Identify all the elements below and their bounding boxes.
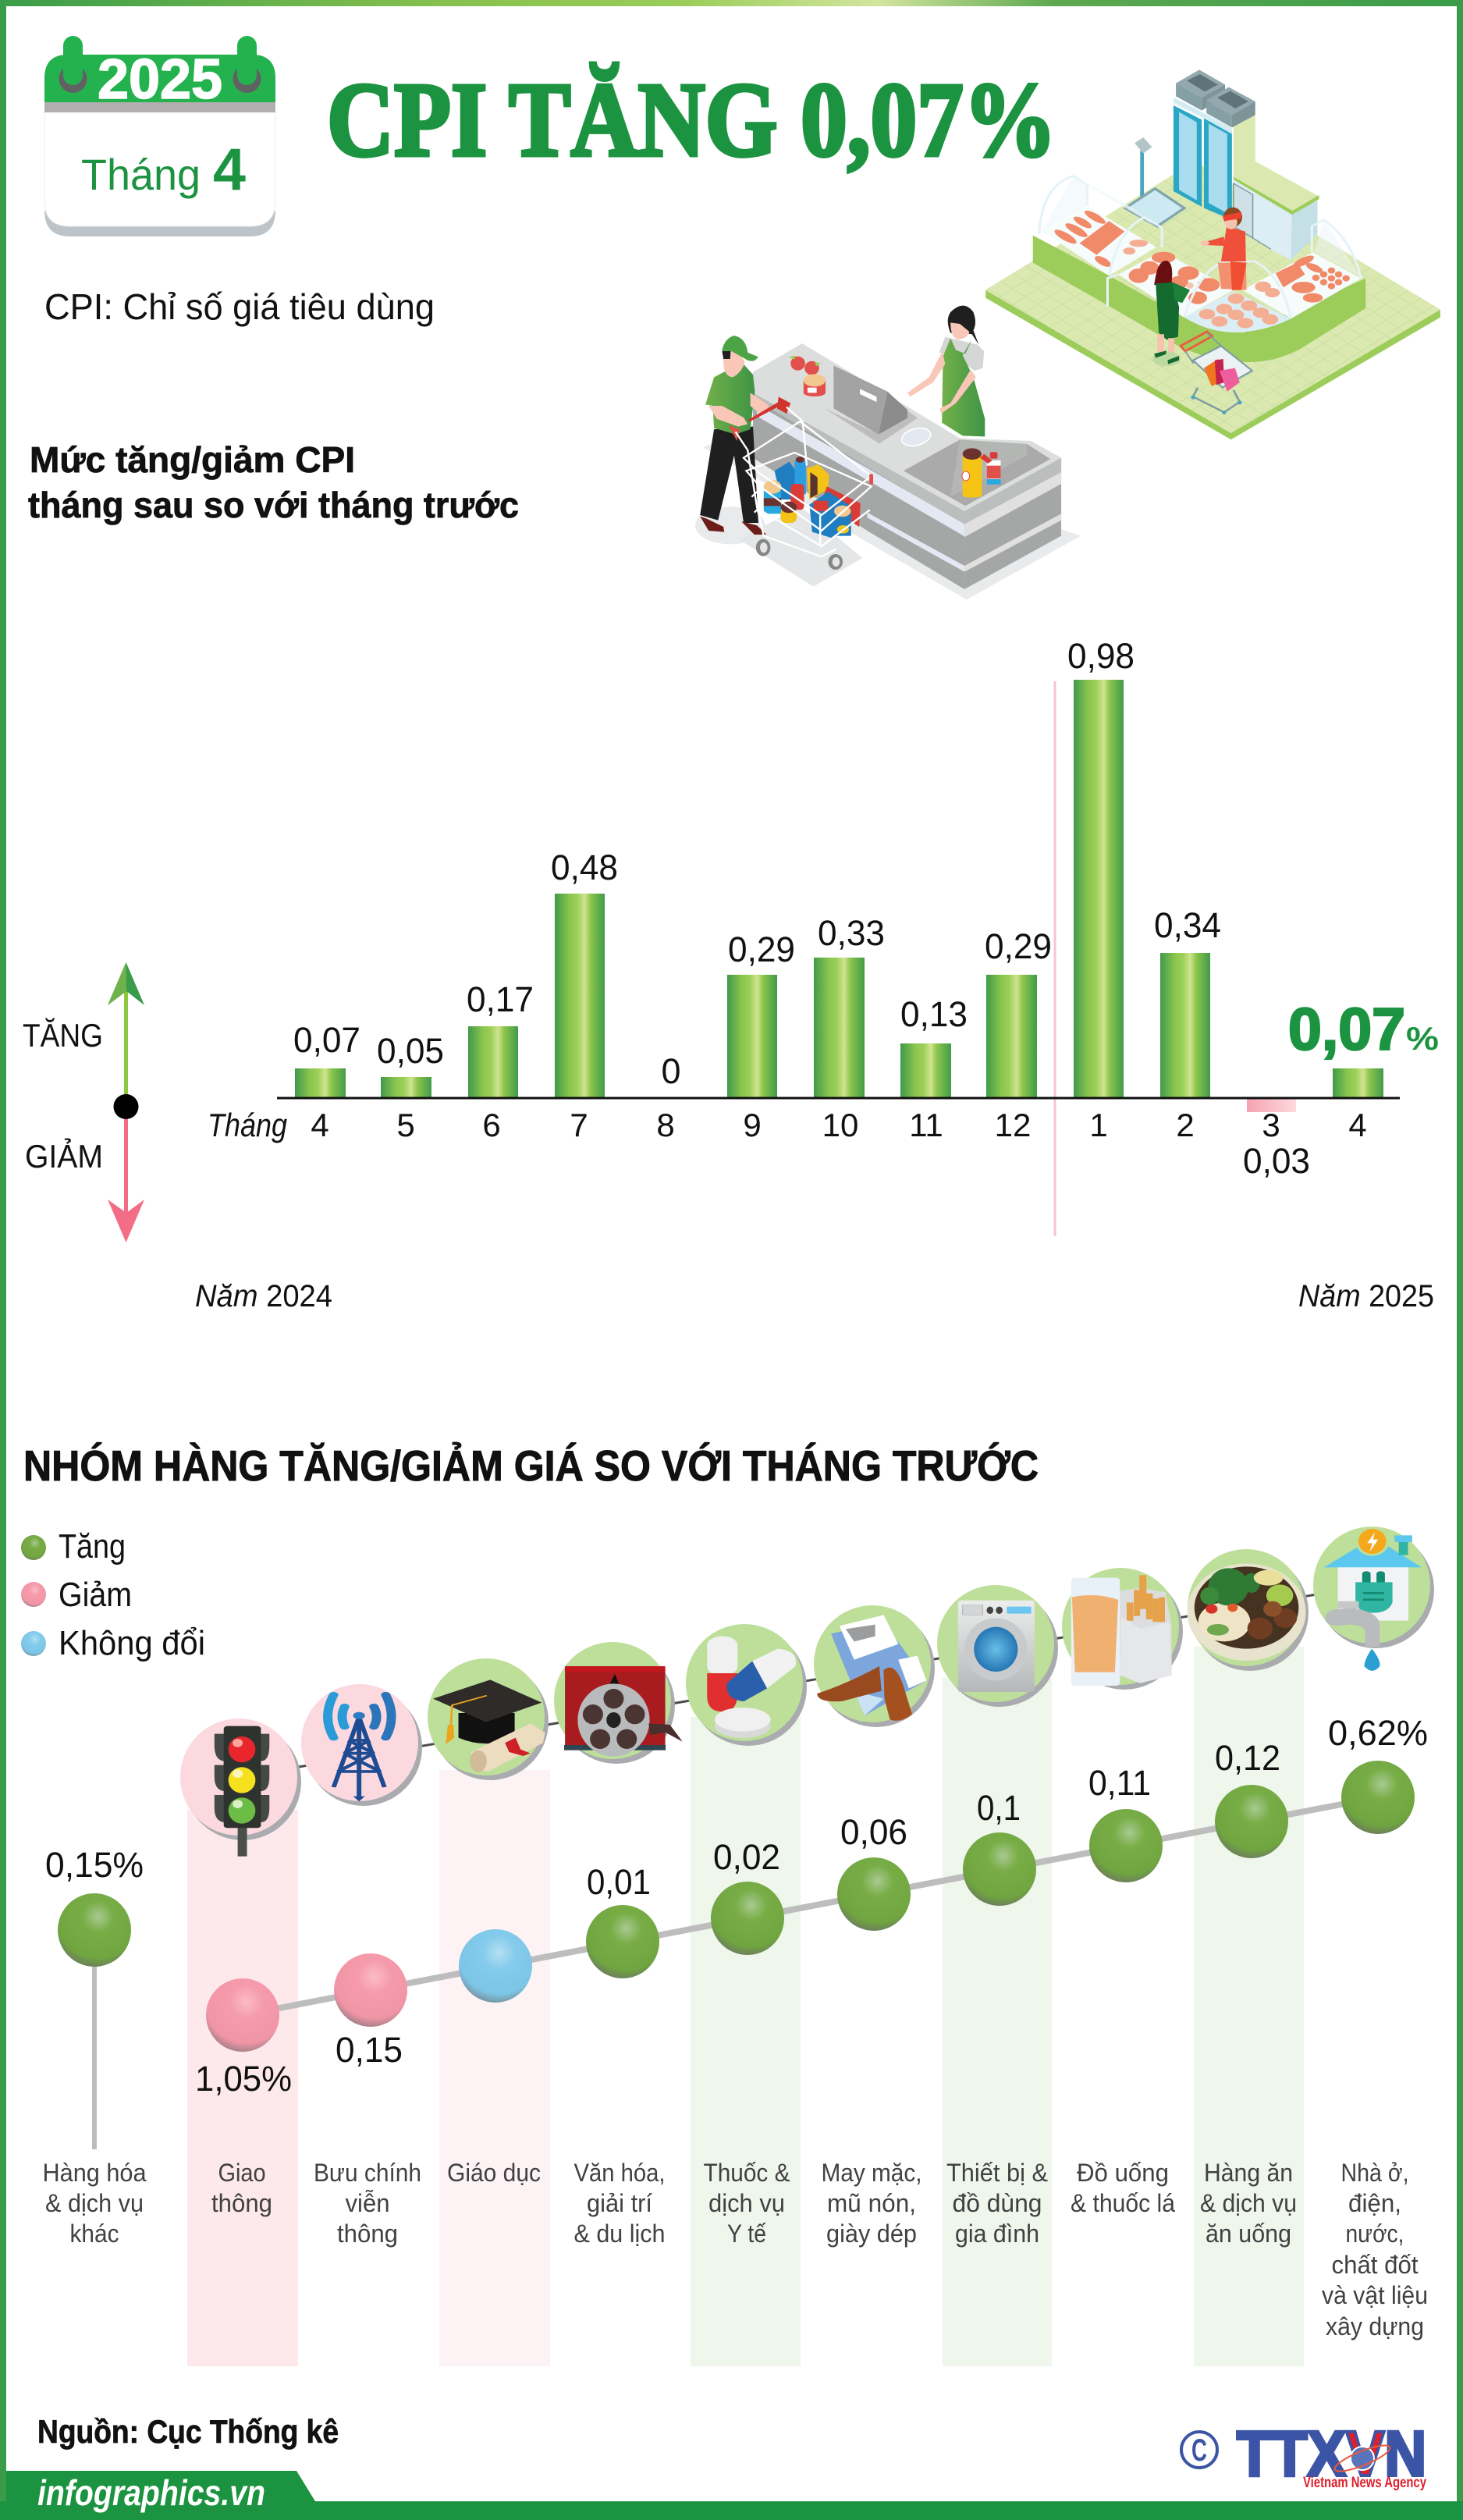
category highlight columns bbox=[187, 1647, 1304, 2366]
category names: Y tế bbox=[727, 2220, 766, 2248]
bar values: 0,34 bbox=[1154, 905, 1221, 945]
icon: noodle bowl bbox=[1188, 1563, 1306, 1661]
connector lines for balls bbox=[94, 1797, 1378, 2149]
highlighted value: % bbox=[1406, 1020, 1439, 1057]
bar values: 0,13 bbox=[900, 994, 968, 1034]
apples and can bbox=[789, 355, 826, 396]
bar values: 0,29 bbox=[985, 926, 1052, 966]
legend: Không đổi bbox=[59, 1624, 205, 1662]
month axis labels: 12 bbox=[995, 1107, 1031, 1143]
value labels per category: 0,15% bbox=[45, 1845, 144, 1885]
category names: gia đình bbox=[955, 2220, 1039, 2248]
legend bbox=[21, 1527, 205, 1662]
value labels per category: 0,62% bbox=[1328, 1713, 1428, 1753]
bar values bbox=[293, 636, 1310, 1181]
month axis labels: 10 bbox=[822, 1107, 858, 1143]
category names: thông bbox=[211, 2189, 272, 2217]
bar values: 0,07 bbox=[293, 1020, 360, 1060]
icon: house utilities bbox=[1324, 1527, 1422, 1671]
legend: Tăng bbox=[59, 1527, 126, 1566]
category names: Thiết bị & bbox=[946, 2159, 1048, 2187]
category names: May mặc, bbox=[821, 2159, 922, 2187]
bar values: 0,29 bbox=[728, 929, 795, 969]
legend: Giảm bbox=[59, 1576, 132, 1614]
month axis labels: 8 bbox=[656, 1107, 675, 1143]
month axis labels: 2 bbox=[1176, 1107, 1195, 1143]
category names: Hàng hóa bbox=[42, 2159, 147, 2187]
icon connector line bbox=[239, 1585, 1372, 1777]
balls: values per category bbox=[58, 1761, 1415, 2052]
woman in red bbox=[1201, 208, 1247, 290]
category names: & dịch vụ bbox=[45, 2189, 144, 2217]
category names: Đồ uống bbox=[1077, 2159, 1169, 2187]
category names: và vật liệu bbox=[1322, 2281, 1428, 2309]
logo: TTXVN: C bbox=[1191, 2433, 1207, 2468]
month axis labels: 7 bbox=[570, 1107, 588, 1143]
illustration: meat counter bbox=[985, 69, 1440, 439]
footer tab: infographics.vn: infographics.vn bbox=[37, 2472, 265, 2513]
logo: TTXVN: TTXVN bbox=[1237, 2419, 1426, 2490]
value labels per category: 0,02 bbox=[713, 1837, 780, 1877]
icon: traffic light bbox=[215, 1726, 269, 1857]
icon circles bbox=[180, 1527, 1434, 1840]
icon: washing machine bbox=[958, 1601, 1035, 1692]
month axis labels: 11 bbox=[909, 1107, 943, 1143]
customer bbox=[700, 336, 790, 535]
calendar badge: 4 bbox=[213, 137, 246, 203]
arrow legend: up / down bbox=[23, 962, 144, 1242]
value labels per category: 0,12 bbox=[1215, 1738, 1280, 1778]
month axis labels: 9 bbox=[743, 1107, 762, 1143]
arrow legend: up / down: GIẢM bbox=[25, 1137, 103, 1175]
highlighted value: 0,07 bbox=[1288, 997, 1405, 1063]
category names: giày dép bbox=[826, 2220, 917, 2248]
source note: Nguồn: Cục Thống kê bbox=[37, 2413, 339, 2450]
section heading: monthly CPI chart: tháng sau so với tháng trước bbox=[28, 485, 519, 525]
category names: chất đốt bbox=[1331, 2251, 1419, 2279]
subtitle: CPI definition: CPI: Chỉ số giá tiêu dùng bbox=[44, 286, 435, 327]
value labels per category: 0,15 bbox=[336, 2030, 403, 2070]
category names: xây dựng bbox=[1326, 2312, 1424, 2341]
month axis labels: 3 bbox=[1262, 1107, 1280, 1143]
year labels: Năm 2025 bbox=[1298, 1279, 1434, 1313]
logo: TTXVN: Vietnam News Agency bbox=[1303, 2475, 1426, 2491]
category names bbox=[42, 2159, 1428, 2341]
month axis labels: 4 bbox=[311, 1107, 329, 1143]
category names: Giao bbox=[218, 2159, 265, 2187]
icon: drink and cigarettes bbox=[1071, 1575, 1172, 1686]
illustration: checkout counter bbox=[695, 306, 1081, 599]
year labels bbox=[195, 1279, 1434, 1313]
section heading: monthly CPI chart: Mức tăng/giảm CPI bbox=[30, 439, 355, 480]
category names: Văn hóa, bbox=[574, 2159, 665, 2187]
bottles in bin bbox=[962, 448, 1001, 498]
value labels per category: 0,1 bbox=[977, 1788, 1021, 1828]
bar values: 0,05 bbox=[377, 1031, 444, 1071]
arrow legend: up / down: TĂNG bbox=[23, 1017, 103, 1054]
icons: left group bbox=[215, 1637, 796, 1857]
bar values: 0,03 bbox=[1243, 1141, 1310, 1181]
category names: Giáo dục bbox=[447, 2159, 541, 2187]
month axis labels: Tháng bbox=[208, 1107, 287, 1143]
bar values: 0,17 bbox=[467, 979, 534, 1019]
value labels per category bbox=[45, 1713, 1428, 2099]
cashier bbox=[907, 306, 985, 436]
section heading: monthly CPI chart bbox=[28, 439, 519, 525]
icon: graduation cap and diploma bbox=[433, 1679, 545, 1772]
title: CPI TĂNG 0,07% bbox=[327, 62, 1056, 179]
woman in green bbox=[1152, 261, 1194, 366]
section heading: product groups: NHÓM HÀNG TĂNG/GIẢM GIÁ SO VỚI THÁNG TRƯỚC bbox=[23, 1441, 1039, 1490]
green counter shopping cart bbox=[1181, 332, 1252, 414]
category names: đồ dùng bbox=[952, 2189, 1042, 2217]
month axis labels: 4 bbox=[1348, 1107, 1367, 1143]
category names: mũ nón, bbox=[827, 2189, 916, 2217]
bar values: 0 bbox=[661, 1051, 681, 1091]
bar values: 0,48 bbox=[551, 848, 618, 887]
bar chart: monthly CPI bbox=[208, 636, 1439, 1236]
calendar badge: Tháng bbox=[81, 150, 201, 199]
category names: thông bbox=[337, 2220, 398, 2248]
category names: Bưu chính bbox=[314, 2159, 421, 2187]
icon: radio tower bbox=[328, 1695, 392, 1801]
bar values: 0,33 bbox=[818, 913, 885, 953]
value labels per category: 0,01 bbox=[587, 1862, 651, 1902]
bar values: 0,98 bbox=[1067, 636, 1135, 676]
icon: film reel and curtain bbox=[564, 1666, 683, 1757]
category names: giải trí bbox=[587, 2189, 652, 2217]
category names: & dịch vụ bbox=[1200, 2189, 1297, 2217]
month axis labels: 1 bbox=[1089, 1107, 1108, 1143]
category names: & du lịch bbox=[574, 2220, 665, 2248]
category names: Hàng ăn bbox=[1204, 2159, 1293, 2187]
value labels per category: 1,05% bbox=[195, 2059, 292, 2099]
month axis labels bbox=[208, 1107, 1367, 1143]
icon: shirt and shoes bbox=[817, 1615, 926, 1721]
category names: ăn uống bbox=[1206, 2220, 1291, 2248]
category names: & thuốc lá bbox=[1071, 2189, 1175, 2217]
month axis labels: 6 bbox=[482, 1107, 501, 1143]
value labels per category: 0,06 bbox=[840, 1812, 907, 1852]
icon: pills bbox=[707, 1637, 796, 1738]
year labels: Năm 2024 bbox=[195, 1279, 332, 1313]
category names: Thuốc & bbox=[704, 2159, 790, 2187]
calendar badge bbox=[44, 36, 275, 236]
category names: nước, bbox=[1345, 2220, 1404, 2248]
value labels per category: 0,11 bbox=[1088, 1763, 1151, 1803]
icons: right group bbox=[817, 1527, 1422, 1721]
category names: viễn bbox=[345, 2189, 390, 2217]
shopping cart with goods bbox=[736, 407, 873, 570]
calendar badge: 2025 bbox=[98, 48, 222, 111]
category names: điện, bbox=[1348, 2189, 1401, 2217]
category names: dịch vụ bbox=[708, 2189, 785, 2217]
category names: khác bbox=[70, 2220, 119, 2248]
month axis labels: 5 bbox=[396, 1107, 415, 1143]
category names: Nhà ở, bbox=[1340, 2159, 1409, 2187]
